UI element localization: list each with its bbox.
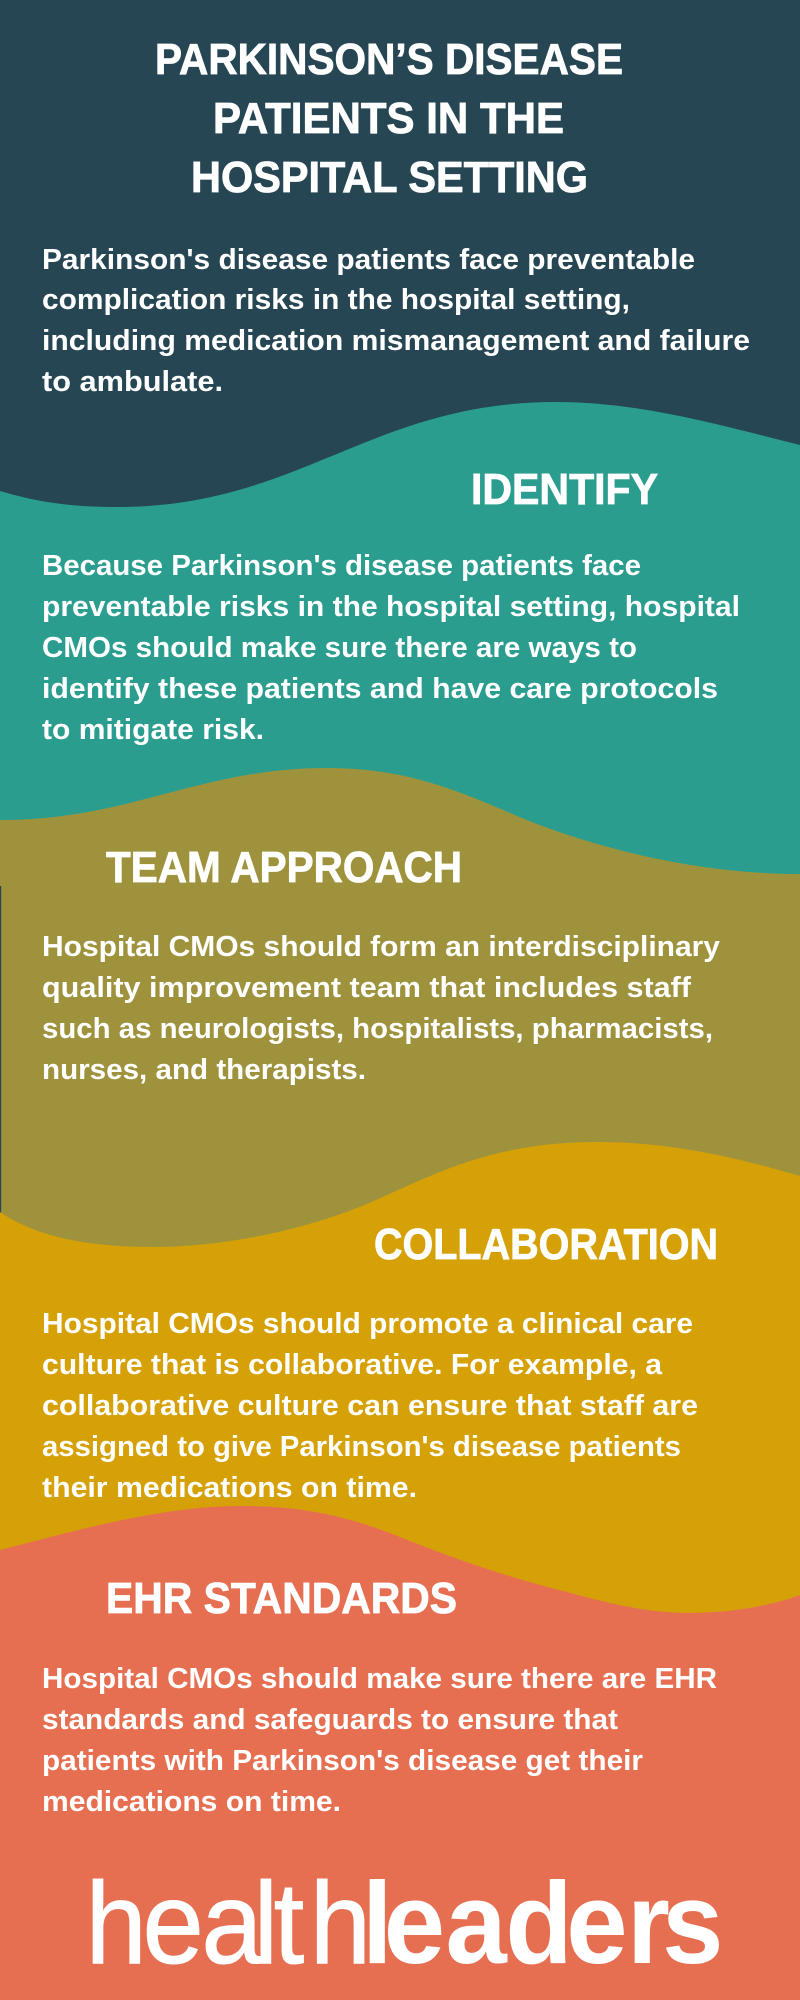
text block: EHR standards: patients with Parkinson's disease get their (42, 1745, 643, 1777)
panel: identify wave (0, 402, 800, 2000)
title: HOSPITAL SETTING (191, 153, 588, 202)
logo: healthleaders: leaders (362, 1858, 723, 1988)
text block: intro: complication risks in the hospital setting, (42, 284, 630, 316)
heading: identify: IDENTIFY (471, 465, 658, 514)
heading: team approach: TEAM APPROACH (106, 843, 462, 892)
text block: EHR standards: Hospital CMOs should make sure there are EHR (42, 1663, 717, 1695)
text block: intro: Parkinson's disease patients face preventable (42, 244, 695, 276)
text block: collaboration: assigned to give Parkinson's disease patients (42, 1431, 681, 1463)
title: PARKINSON’S DISEASE (155, 35, 623, 84)
text block: intro (42, 244, 750, 398)
panel: collaboration wave (0, 1142, 800, 2000)
text block: team approach: such as neurologists, hospitalists, pharmacists, (42, 1013, 713, 1045)
text block: team approach: nurses, and therapists. (42, 1054, 366, 1086)
text block: identify: to mitigate risk. (42, 714, 264, 746)
text block: team approach (42, 931, 720, 1086)
text block: EHR standards: standards and safeguards to ensure that (42, 1704, 618, 1736)
text block: intro: including medication mismanagement and failure (42, 325, 750, 357)
text block: collaboration (42, 1308, 698, 1504)
text block: identify (42, 550, 740, 746)
text block: intro: to ambulate. (42, 366, 223, 398)
logo: healthleaders: health (86, 1858, 371, 1988)
text block: collaboration: Hospital CMOs should promote a clinical care (42, 1308, 693, 1340)
heading: collaboration: COLLABORATION (374, 1220, 718, 1269)
text block: identify: CMOs should make sure there are ways to (42, 632, 637, 664)
text block: identify: identify these patients and have care protocols (42, 673, 718, 705)
text block: identify: Because Parkinson's disease patients face (42, 550, 641, 582)
title (155, 35, 623, 202)
text block: EHR standards (42, 1663, 717, 1818)
title: PATIENTS IN THE (213, 94, 564, 143)
heading: EHR standards: EHR STANDARDS (106, 1574, 457, 1623)
text block: collaboration: culture that is collaborative. For example, a (42, 1349, 663, 1381)
panel: team approach wave (0, 768, 800, 1300)
panel: EHR standards wave (0, 1506, 800, 2000)
text block: EHR standards: medications on time. (42, 1786, 341, 1818)
text block: team approach: Hospital CMOs should form an interdisciplinary (42, 931, 720, 963)
text block: team approach: quality improvement team that includes staff (42, 972, 691, 1004)
text block: collaboration: their medications on time. (42, 1472, 417, 1504)
text block: collaboration: collaborative culture can ensure that staff are (42, 1390, 698, 1422)
text block: identify: preventable risks in the hospital setting, hospital (42, 591, 740, 623)
